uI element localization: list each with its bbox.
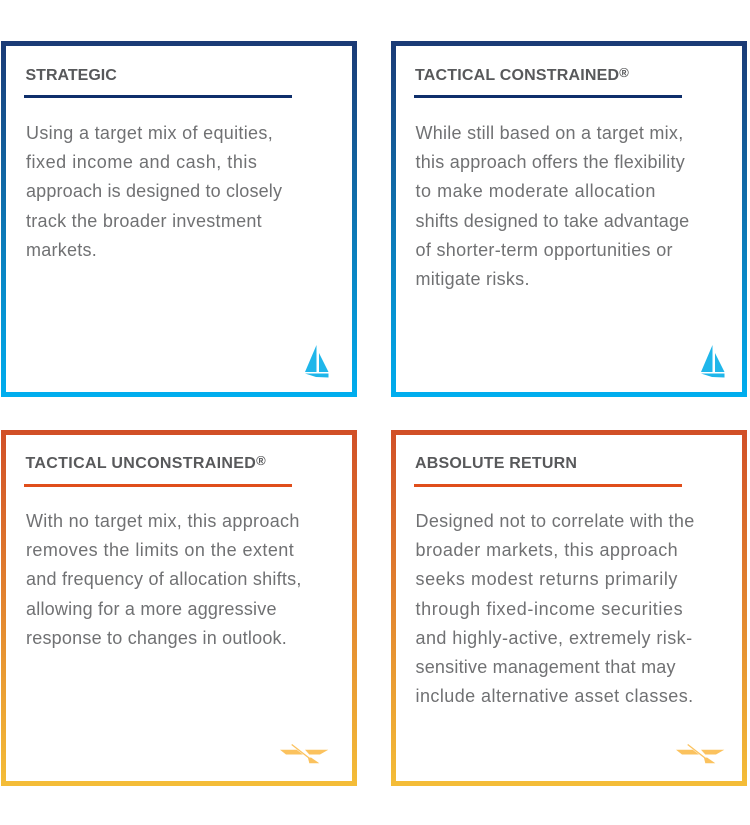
- text: strategic description: markets.: [26, 240, 97, 260]
- text: absolute return description: Designed not to correlate with the: [416, 511, 695, 531]
- text: tactical constrained description: While still based on a target mix,: [416, 123, 683, 143]
- text: tactical unconstrained description: removes the limits on the extent: [26, 540, 294, 560]
- text: strategic description: approach is designed to closely: [26, 181, 282, 201]
- text: tactical unconstrained description: response to changes in outlook.: [26, 628, 287, 648]
- text: tactical constrained description: [416, 123, 689, 289]
- text: strategic description: track the broader investment: [26, 211, 262, 231]
- text: tactical unconstrained description: allowing for a more aggressive: [26, 599, 277, 619]
- panel: absolute return: [391, 430, 747, 786]
- text: tactical constrained description: shifts designed to take advantage: [416, 211, 689, 231]
- text: tactical constrained description: mitigate risks.: [416, 269, 530, 289]
- text: absolute return description: seeks modest returns primarily: [416, 569, 678, 589]
- text: absolute return description: sensitive management that may: [416, 657, 676, 677]
- text: absolute return description: broader markets, this approach: [416, 540, 678, 560]
- text: strategic description: Using a target mix of equities,: [26, 123, 273, 143]
- panel: tactical constrained: [391, 41, 747, 397]
- text: absolute return description: [416, 511, 695, 706]
- heading: tactical unconstrained: TACTICAL UNCONSTRAINED®: [26, 453, 266, 472]
- icon: rowing oars: [676, 744, 724, 764]
- icon: sailboat: [701, 345, 724, 378]
- heading: strategic: STRATEGIC: [26, 66, 117, 84]
- text: tactical unconstrained description: With no target mix, this approach: [26, 511, 300, 531]
- text: strategic description: fixed income and cash, this: [26, 152, 257, 172]
- icon: rowing oars: [280, 744, 328, 764]
- text: absolute return description: through fixed-income securities: [416, 599, 683, 619]
- text: tactical constrained description: this approach offers the flexibility: [416, 152, 685, 172]
- heading: absolute return: ABSOLUTE RETURN: [415, 455, 577, 472]
- text: strategic description: [26, 123, 282, 260]
- panel: tactical unconstrained: [1, 430, 357, 786]
- text: tactical unconstrained description: [26, 511, 302, 648]
- text: tactical constrained description: to make moderate allocation: [416, 181, 656, 201]
- icon: sailboat: [305, 345, 328, 378]
- text: tactical unconstrained description: and frequency of allocation shifts,: [26, 569, 302, 589]
- panel: strategic: [1, 41, 357, 397]
- text: absolute return description: include alternative asset classes.: [416, 686, 694, 706]
- text: absolute return description: and highly-active, extremely risk-: [416, 628, 693, 648]
- heading: tactical constrained: TACTICAL CONSTRAINED®: [415, 64, 629, 84]
- text: tactical constrained description: of shorter-term opportunities or: [416, 240, 673, 260]
